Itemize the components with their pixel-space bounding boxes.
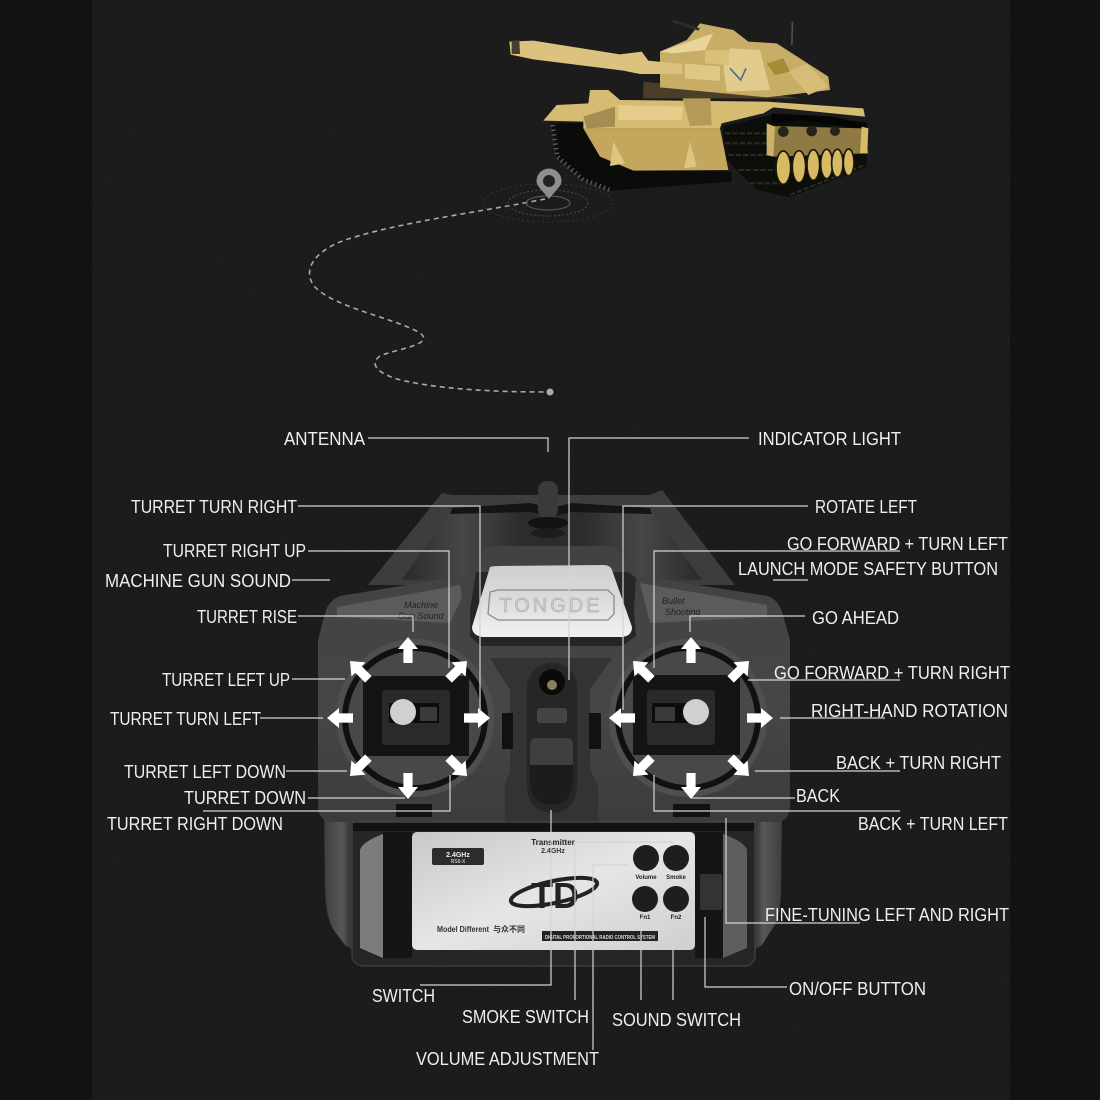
- label plate: DIGITAL PROPORTIONAL RADIO CONTROL SYSTEM: [545, 935, 655, 941]
- callout: volume adjustment: [416, 865, 628, 1069]
- direction arrows: right stick: [609, 637, 773, 799]
- callout: indicator light: [569, 429, 901, 680]
- logo: TD: [531, 875, 579, 916]
- callout: smoke switch: [462, 842, 672, 1027]
- callout: back + turn left: BACK + TURN LEFT: [858, 814, 1008, 834]
- label plate: 与众不同: [493, 924, 525, 934]
- callout: turret rise: [197, 607, 413, 632]
- on/off button: [700, 874, 722, 910]
- knobs: Fn1: [640, 915, 651, 921]
- callout: sound switch: SOUND SWITCH: [612, 1010, 741, 1030]
- panel: machine gun sound: Machine: [404, 600, 438, 610]
- callout: turret down: TURRET DOWN: [184, 788, 306, 808]
- callout: turret right down: TURRET RIGHT DOWN: [107, 814, 283, 834]
- label plate: Model Different: [437, 925, 489, 934]
- callout: go forward + turn left: [654, 534, 1008, 668]
- panel: bullet shooting: Shooting: [665, 607, 701, 617]
- brand plate: TONGDE: [499, 595, 603, 617]
- callout: smoke switch: SMOKE SWITCH: [462, 1007, 589, 1027]
- callout: switch: SWITCH: [372, 986, 435, 1006]
- callout: turret left down: TURRET LEFT DOWN: [124, 762, 286, 782]
- callout: back + turn left: [654, 775, 1008, 834]
- label plate: Transmitter: [531, 838, 575, 847]
- callout: rotate left: ROTATE LEFT: [815, 497, 917, 517]
- icon: map pin: [536, 168, 562, 199]
- label plate: [412, 832, 695, 950]
- lower grips: [324, 810, 782, 958]
- tank illustration: [509, 19, 868, 197]
- callout: on/off button: [705, 917, 926, 999]
- callout: antenna: ANTENNA: [284, 429, 365, 449]
- panel: machine gun sound: [337, 585, 462, 623]
- callout: launch mode safety button: LAUNCH MODE SAFETY BUTTON: [738, 559, 998, 579]
- stick knob: [683, 699, 709, 725]
- callout: turret turn left: TURRET TURN LEFT: [110, 709, 261, 729]
- callout: turret turn right: [131, 497, 480, 712]
- stick knob: [390, 699, 416, 725]
- panel: bullet shooting: [640, 583, 767, 623]
- callout: switch: [372, 810, 551, 1006]
- handle: [368, 490, 735, 585]
- panel: machine gun sound: Gun Sound: [398, 611, 445, 621]
- callout: go ahead: [690, 608, 899, 632]
- direction arrows: left stick: [327, 637, 490, 799]
- panel: bullet shooting: Bullet: [662, 596, 685, 606]
- label plate: 2.4GHz: [446, 852, 470, 859]
- knobs: [632, 845, 689, 921]
- center column: [490, 658, 612, 822]
- callout: on/off button: ON/OFF BUTTON: [789, 979, 926, 999]
- callout: indicator light: INDICATOR LIGHT: [758, 429, 901, 449]
- transmitter body: [318, 481, 790, 966]
- callout: turret right down: [107, 775, 450, 834]
- left gimbal: [336, 639, 494, 797]
- label plate: RS6-X: [451, 859, 466, 865]
- callout: right-hand rotation: RIGHT-HAND ROTATION: [811, 701, 1008, 721]
- right gimbal: [609, 639, 767, 797]
- trim sliders: [396, 713, 710, 817]
- callout: turret rise: TURRET RISE: [197, 607, 297, 627]
- callout: go ahead: GO AHEAD: [812, 608, 899, 628]
- callout: antenna: [284, 429, 548, 452]
- lower compartment: [352, 822, 755, 966]
- brand plate: [472, 565, 632, 637]
- callout: machine gun sound: MACHINE GUN SOUND: [105, 571, 291, 591]
- callout: turret right up: TURRET RIGHT UP: [163, 541, 306, 561]
- callout: fine-tuning left and right: FINE-TUNING LEFT AND RIGHT: [765, 905, 1009, 925]
- callout: turret right up: [163, 541, 449, 668]
- knobs: Smoke: [666, 875, 686, 881]
- antenna: [528, 481, 568, 538]
- callout: go forward + turn left: GO FORWARD + TURN LEFT: [787, 534, 1008, 554]
- callout: fine-tuning left and right: [726, 818, 1009, 925]
- callout: turret left up: TURRET LEFT UP: [162, 670, 290, 690]
- route: dashed path with pin: [309, 168, 613, 396]
- callout: go forward + turn right: GO FORWARD + TURN RIGHT: [774, 663, 1010, 683]
- callout: back: BACK: [796, 786, 840, 806]
- knobs: Fn2: [671, 915, 682, 921]
- knobs: Volume: [635, 875, 657, 881]
- callout: volume adjustment: VOLUME ADJUSTMENT: [416, 1049, 599, 1069]
- label plate: 2.4GHz: [541, 848, 565, 855]
- callout: turret turn right: TURRET TURN RIGHT: [131, 497, 297, 517]
- callout: back + turn right: BACK + TURN RIGHT: [836, 753, 1001, 773]
- main shell: [318, 546, 790, 822]
- callout: rotate left: [623, 497, 917, 710]
- callout: sound switch: [612, 918, 741, 1030]
- logo: [509, 872, 599, 916]
